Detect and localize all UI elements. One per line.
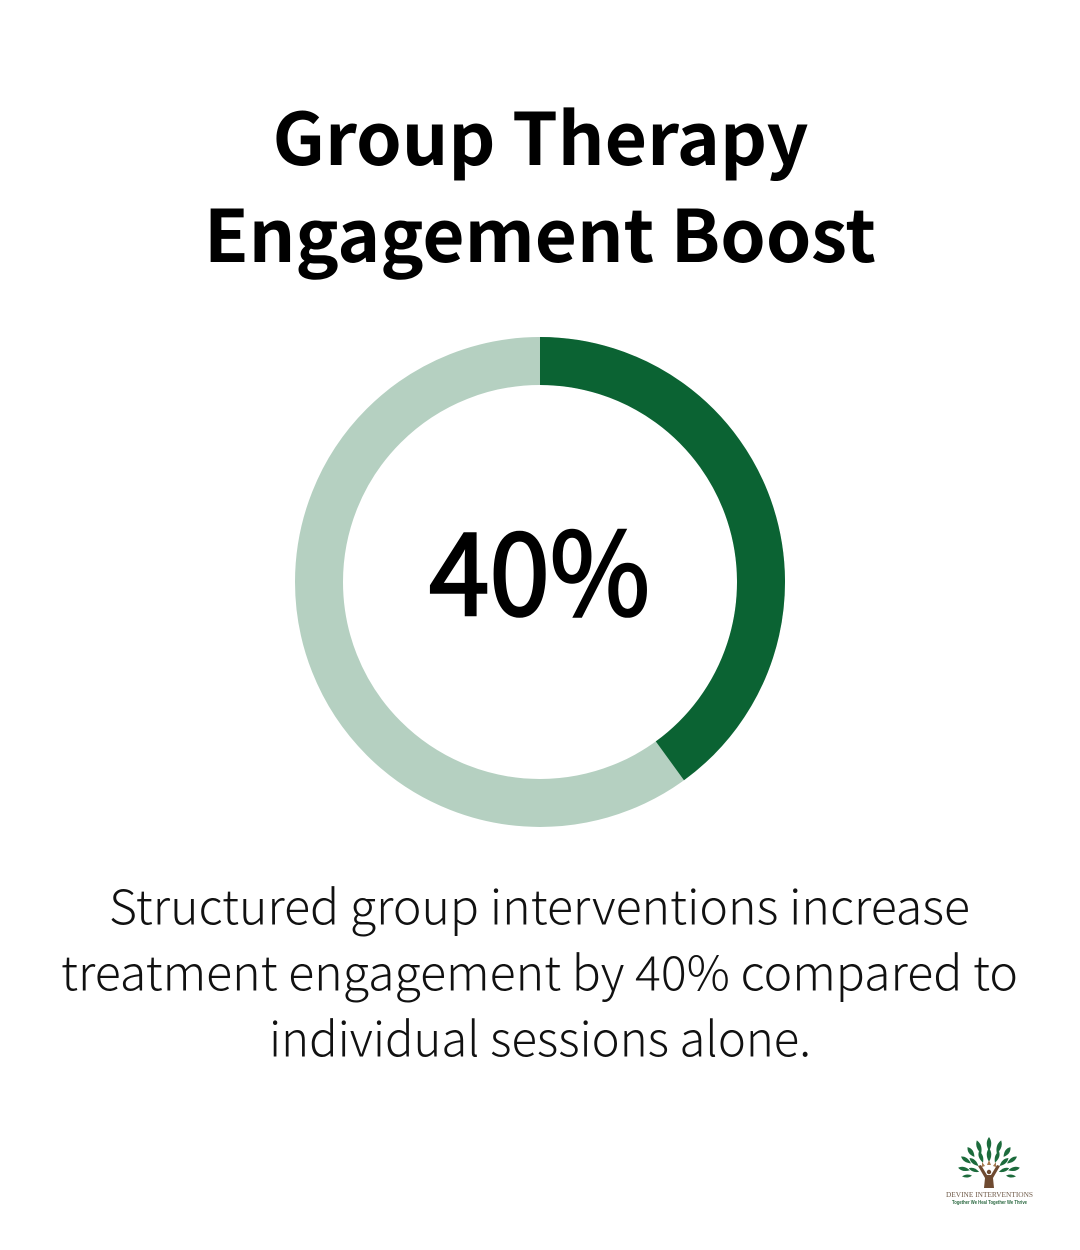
logo name: DEVINE INTERVENTIONS: [946, 1191, 1033, 1199]
title: [204, 81, 876, 283]
title: Group Therapy: [272, 81, 809, 186]
icon: tree trunk and figure: [978, 1160, 1000, 1188]
description text: individual sessions alone.: [269, 1000, 811, 1070]
logo: Devine Interventions: [946, 1137, 1033, 1206]
logo tagline: Together We Heal Together We Thrive: [952, 1200, 1027, 1206]
title: Engagement Boost: [204, 178, 876, 283]
icon: tree leaves: [958, 1137, 1020, 1178]
donut track: [319, 361, 761, 803]
donut chart: 40%: [319, 361, 761, 803]
description text: Structured group interventions increase: [109, 868, 970, 938]
description text: treatment engagement by 40% compared to: [61, 934, 1018, 1004]
description text: [61, 868, 1018, 1070]
donut value arc: [540, 361, 761, 761]
center value: 40%: [429, 483, 650, 648]
